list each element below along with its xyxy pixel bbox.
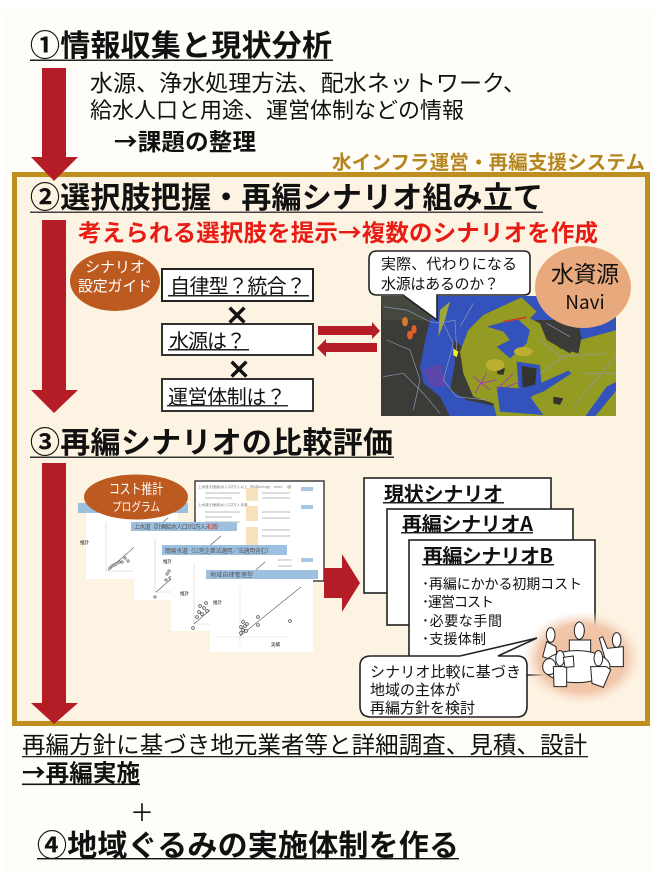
chart 2: 推計 [163, 558, 172, 565]
icon: people at a table [543, 622, 623, 687]
scenario B list: ･支援体制 [422, 629, 486, 649]
scenario card: A: 再編シナリオA [402, 508, 533, 537]
arrow: step 3 to result [31, 463, 78, 724]
spreadsheet: average stdev. t値 [258, 484, 292, 489]
chart 1 [78, 503, 188, 579]
heading: step 3: ③再編シナリオの比較評価 [30, 418, 393, 462]
spreadsheet: 上水道 計画給水人口2万人以上（料金） [198, 484, 262, 490]
speech bubble: regional decision [360, 638, 537, 718]
text block: step 1 details: 水源、浄水処理方法、配水ネットワーク、 [90, 64, 526, 98]
scenario B list: ･必要な手間 [422, 611, 502, 631]
scenario B list: ･運営コスト [422, 592, 494, 612]
chart 3 [162, 545, 287, 631]
scenario B list [422, 574, 582, 649]
speech bubble: regional decision: 再編方針を検討 [370, 697, 475, 718]
heading: step 4: ④地域ぐるみの実施体制を作る [37, 821, 459, 865]
arrow: step 2 to 3 [31, 220, 78, 413]
speech bubble: regional decision: 地域の主体が [370, 679, 460, 700]
text block: detailed survey: 再編方針に基づき地元業者等と詳細調査、見積、設計 [22, 726, 587, 760]
spreadsheet: 上水道 計画給水人口2万人未満 [198, 502, 248, 508]
speech bubble: alternative water source: 実際、代わりになる [381, 253, 517, 274]
chart 4 [206, 570, 318, 652]
chart 4: 地域自律管理型 [210, 570, 253, 579]
multiply sign 1: × [225, 296, 249, 331]
text block: reorganization: →再編実施 [22, 754, 140, 788]
speech bubble: alternative water source [369, 251, 530, 320]
chart 3: 簡易水道（公営企業法適用／法適用含む） [165, 546, 272, 555]
chart 2: 上水道（計画給水人口が2万人未満） [134, 522, 222, 531]
box: autonomous or integrated: 自律型？統合？ [170, 270, 306, 299]
arrow: from map [317, 339, 377, 357]
badge: cost estimation program: コスト推計 [109, 479, 163, 499]
box: water source [162, 324, 313, 355]
arrow: to map [318, 322, 380, 339]
scenario card: current: 現状シナリオ [384, 478, 503, 507]
arrow: step 1 to 2 [31, 68, 78, 181]
speech bubble: alternative water source: 水源はあるのか？ [381, 273, 499, 294]
box: water source: 水源は？ [169, 325, 246, 354]
scenario guide badge [70, 251, 160, 311]
glow behind meeting [522, 611, 642, 705]
cost sheets collage [78, 481, 324, 652]
plus sign: ＋ [130, 793, 154, 828]
box: operating structure: 運営体制は？ [168, 381, 286, 410]
chart 3: 推計 [180, 590, 189, 597]
scenario card: A [387, 508, 573, 625]
text block: step 1 details: 給水人口と用途、運営体制などの情報 [90, 93, 464, 125]
text block: step 1 details: →課題の整理 [114, 123, 256, 157]
heading: step 1: ①情報収集と現状分析 [30, 21, 332, 65]
badge: cost estimation program: プログラム [112, 498, 160, 515]
badge: water resource navi: 水資源 [551, 255, 619, 289]
arrow: to scenarios [324, 554, 360, 612]
badge: water resource navi: Navi [565, 288, 605, 315]
chart 1: 推計 [80, 539, 89, 546]
multiply sign 2: × [227, 350, 251, 385]
chart 4: 推計 [213, 599, 222, 606]
scenario B list: ･再編にかかる初期コスト [422, 574, 582, 594]
red subheading: 考えられる選択肢を提示→複数のシナリオを作成 [78, 214, 598, 248]
badge: water resource navi [535, 246, 631, 328]
spreadsheet [195, 481, 324, 581]
scenario guide badge: 設定ガイド [78, 275, 152, 296]
text block: step 1 details [90, 64, 526, 157]
scenario card: B [409, 540, 595, 675]
speech bubble: regional decision: シナリオ比較に基づき [370, 661, 521, 682]
map: water resources [381, 296, 630, 417]
scenario card: current [364, 478, 551, 593]
system label: 水インフラ運営・再編支援システム [332, 146, 645, 175]
chart 2 [131, 522, 237, 600]
badge: cost estimation program [84, 474, 188, 520]
scenario card: B: 再編シナリオB [423, 540, 553, 569]
chart 4: 実績 [271, 641, 280, 648]
heading: step 2: ②選択肢把握・再編シナリオ組み立て [30, 173, 543, 217]
scenario guide badge: シナリオ [85, 256, 145, 277]
